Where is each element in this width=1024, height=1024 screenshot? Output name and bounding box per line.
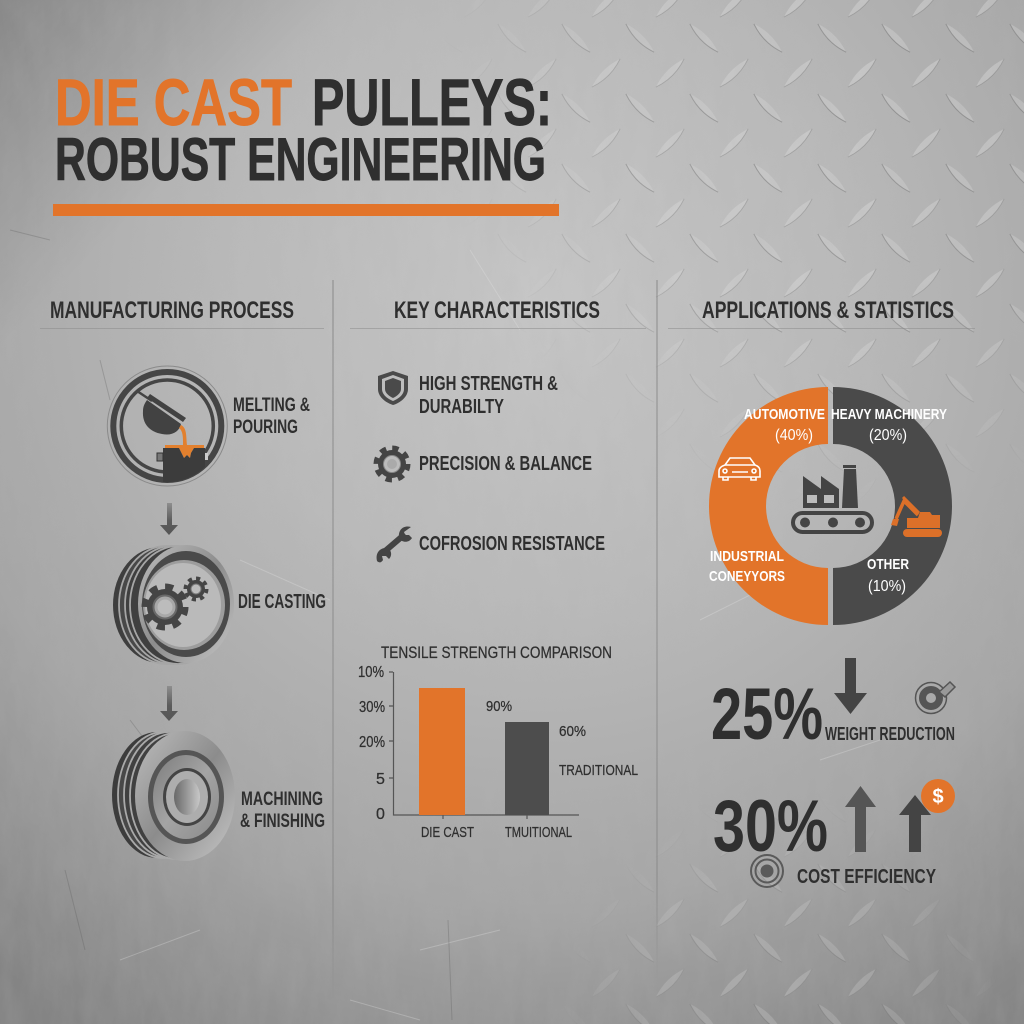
label: industrial conveyors: INDUSTRIAL	[710, 548, 784, 565]
arrow: down	[834, 658, 867, 714]
icon: pie gauge	[916, 682, 955, 714]
label: die cast: DIE CAST	[421, 824, 474, 841]
icon: car	[719, 458, 760, 480]
label: other: OTHER	[867, 556, 909, 573]
text: high strength: HIGH STRENGTH &	[419, 373, 558, 395]
label: industrial conveyors	[709, 548, 785, 585]
label: machining and finishing	[240, 789, 325, 832]
y axis labels: 10%	[358, 664, 384, 681]
label: industrial conveyors: CONEYYORS	[709, 568, 785, 585]
chart title: TENSILE STRENGTH COMPARISON	[381, 643, 612, 662]
stat: 30% cost efficiency	[713, 779, 955, 888]
text: precision and balance: PRECISION & BALANCE	[419, 453, 592, 475]
label: automotive: AUTOMOTIVE	[744, 406, 825, 423]
bar: traditional	[505, 722, 549, 815]
label: automotive	[744, 406, 825, 444]
label: other: (10%)	[868, 578, 906, 595]
label: other	[867, 556, 909, 595]
label: heavy machinery: (20%)	[869, 427, 907, 444]
arrow: up 1	[845, 786, 876, 852]
panel: applications and statistics	[702, 297, 955, 888]
label: machining and finishing: MACHINING	[241, 789, 323, 810]
label: melting and pouring: POURING	[233, 417, 298, 438]
title: PULLEYS:	[312, 65, 552, 139]
value: 60%: 60%	[559, 723, 586, 740]
panel: manufacturing process	[50, 297, 326, 861]
number: 25%: 25%	[711, 674, 823, 755]
chart: tensile strength comparison	[358, 643, 638, 841]
y axis labels: 20%	[359, 734, 385, 751]
title	[55, 65, 552, 193]
icon: gear	[377, 449, 407, 479]
donut chart	[709, 387, 952, 625]
icon: dollar badge	[921, 779, 955, 813]
icon: pulley with gears	[113, 545, 234, 664]
icon: shield	[378, 371, 408, 405]
label: die casting: DIE CASTING	[238, 591, 326, 613]
label: melting and pouring: MELTING &	[233, 395, 310, 416]
label: machining and finishing: & FINISHING	[240, 811, 325, 832]
arrow: step 2 to 3	[160, 686, 178, 721]
bar: die cast	[419, 688, 465, 815]
label: heavy machinery	[831, 406, 947, 444]
y axis labels	[358, 664, 385, 823]
y axis labels: 0	[376, 806, 385, 823]
icon: dollar badge: $	[932, 786, 944, 808]
title underline	[53, 204, 559, 216]
label: heavy machinery: HEAVY MACHINERY	[831, 406, 947, 423]
column dividers	[40, 280, 975, 1000]
number: 30%: 30%	[713, 786, 828, 867]
icon: melting and pouring	[107, 366, 227, 486]
title: DIE CAST	[55, 65, 292, 139]
y axis labels: 30%	[359, 699, 385, 716]
label: cost efficiency: COST EFFICIENCY	[797, 866, 937, 888]
label: traditional side: TRADITIONAL	[559, 762, 638, 779]
arrow: step 1 to 2	[160, 503, 178, 535]
label: automotive: (40%)	[775, 427, 813, 444]
segment: orange half	[709, 387, 828, 625]
title: ROBUST ENGINEERING	[55, 126, 546, 193]
segment: dark half	[833, 387, 952, 625]
arrow: up 2	[899, 795, 931, 852]
icon: factory on conveyor	[793, 465, 872, 532]
heading: manufacturing process: MANUFACTURING PROCESS	[50, 297, 294, 324]
text: high strength: DURABILTY	[419, 396, 504, 418]
text: corrosion resistance: COFROSION RESISTANCE	[419, 533, 605, 555]
panel: key characteristics	[358, 297, 638, 841]
stat: 25% weight reduction	[711, 658, 955, 755]
icon: target	[751, 855, 783, 887]
icon: excavator	[891, 497, 942, 537]
label: traditional: TMUITIONAL	[505, 824, 572, 841]
icon: finished pulley	[112, 731, 235, 861]
label: melting and pouring	[233, 395, 310, 438]
text: high strength	[419, 373, 558, 418]
icon: wrench	[377, 527, 412, 562]
label: weight reduction: WEIGHT REDUCTION	[825, 724, 955, 744]
heading: key characteristics: KEY CHARACTERISTICS	[394, 297, 600, 324]
y axis labels: 5	[376, 771, 385, 788]
value: 90%: 90%	[486, 698, 512, 715]
